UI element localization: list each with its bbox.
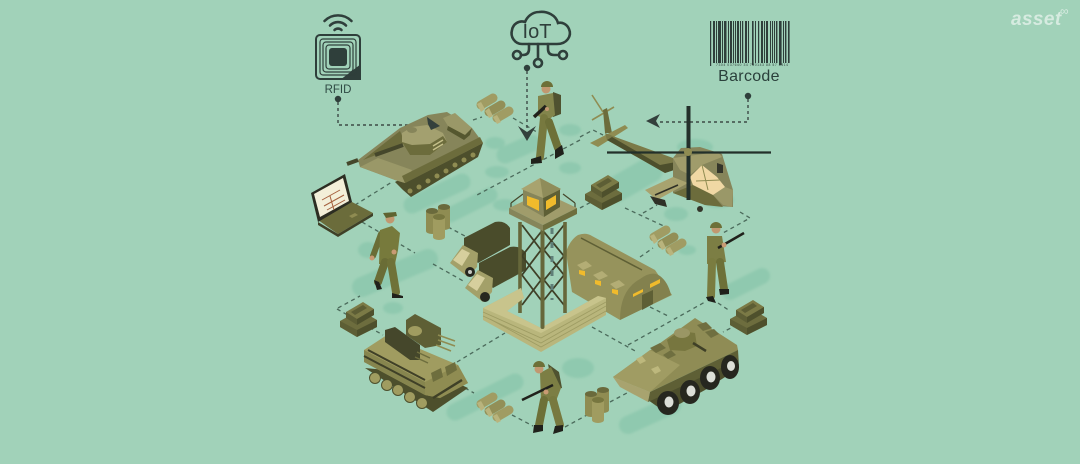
laptop — [311, 174, 373, 237]
arrow: IoT pointer head — [518, 126, 536, 141]
AA vehicle tracks — [365, 368, 468, 412]
helicopter tail fin — [603, 108, 612, 133]
watch tower — [509, 178, 577, 327]
tower roof — [521, 178, 561, 198]
icon: IoT cloud — [512, 12, 570, 67]
APC wheels — [657, 355, 739, 415]
logo: asset: asset — [1011, 9, 1062, 30]
crate near helicopter — [585, 175, 622, 210]
soldier: top — [531, 81, 564, 164]
helicopter nose — [713, 187, 733, 207]
barrels: bottom — [585, 387, 609, 423]
tower platform — [509, 192, 577, 225]
RFID pointer line — [335, 96, 428, 125]
tank tracks — [395, 140, 483, 197]
IoT pointer line — [524, 65, 530, 128]
icon: RFID tag: RFID — [325, 84, 351, 96]
AA gun turrets — [406, 314, 441, 348]
logo: asset: ∞ — [1060, 4, 1069, 18]
tower ladder — [550, 228, 554, 300]
APC upper hull — [613, 318, 738, 392]
icon: barcode — [710, 21, 790, 85]
icon: barcode: Barcode — [718, 68, 780, 85]
helicopter wing — [645, 177, 688, 200]
tower legs — [520, 222, 565, 327]
truck: front — [465, 247, 526, 302]
hangar — [566, 234, 672, 320]
barrels near laptop — [426, 204, 450, 240]
ground shadows — [358, 124, 762, 425]
tank turret — [402, 125, 447, 155]
crate: left — [340, 302, 377, 337]
APC lower hull — [648, 350, 739, 412]
tank rear box — [443, 113, 472, 135]
shells: bottom — [477, 397, 509, 423]
icon: RFID tag — [316, 15, 361, 96]
icon: barcode: 7304 037640 34 760143 88 57 8514 — [716, 63, 788, 67]
soldier: bottom — [522, 361, 563, 434]
helicopter stabilizer — [590, 125, 628, 147]
dashed connection network — [337, 117, 750, 427]
helicopter boom — [605, 133, 680, 173]
tower cabin — [523, 189, 544, 217]
armored personnel carrier — [613, 318, 739, 415]
helicopter lower hull — [673, 185, 723, 207]
shells near tank — [477, 98, 509, 124]
tank — [347, 112, 483, 197]
AA vehicle body — [364, 335, 468, 398]
tank gun — [347, 145, 403, 164]
Barcode pointer line — [660, 93, 751, 122]
arrow: RFID pointer head — [427, 117, 440, 130]
helicopter engine hump — [673, 152, 722, 175]
crate: right — [730, 300, 767, 335]
officer — [370, 212, 403, 298]
helicopter weapon pods — [650, 196, 667, 207]
helicopter canopy — [690, 165, 725, 195]
helicopter — [590, 95, 771, 212]
shells: right — [650, 230, 682, 256]
anti-aircraft vehicle — [364, 314, 468, 412]
tank hull — [358, 112, 483, 183]
APC turret — [667, 331, 697, 351]
helicopter tail rotor — [592, 95, 614, 120]
arrow: Barcode pointer head — [646, 114, 660, 128]
sandbag wall — [483, 288, 606, 352]
soldier: right — [706, 222, 744, 303]
icon: IoT cloud: IoT — [523, 21, 551, 43]
helicopter rotor — [607, 151, 771, 154]
helicopter body — [673, 147, 733, 207]
tower bracing — [522, 225, 564, 305]
truck: rear — [450, 222, 510, 277]
tower railing — [511, 194, 575, 209]
